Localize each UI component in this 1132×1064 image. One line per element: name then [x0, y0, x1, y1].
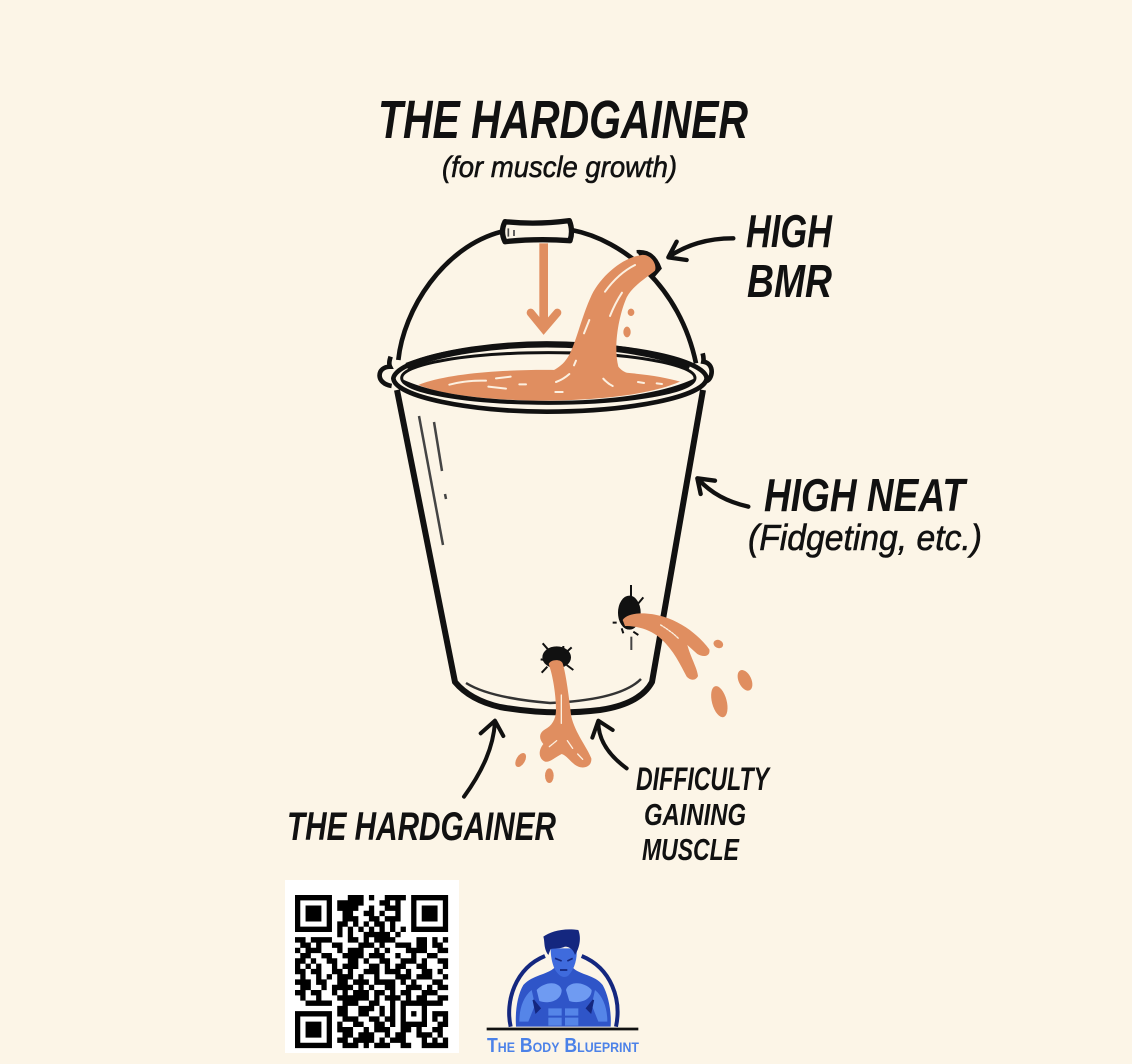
- bucket inner base line: [466, 679, 641, 703]
- logo face shadow: [555, 958, 573, 970]
- rim front stroke: [403, 381, 694, 403]
- label: difficulty gaining muscle: MUSCLE: [642, 832, 740, 867]
- subtitle: (for muscle growth): [442, 151, 677, 184]
- bucket reflection lines: [419, 416, 446, 545]
- logo base line: [487, 1025, 638, 1033]
- title: THE HARDGAINER: [378, 90, 748, 150]
- label: difficulty gaining muscle: [636, 761, 771, 867]
- logo hair: [543, 929, 580, 955]
- bucket body: [397, 390, 703, 712]
- label: difficulty gaining muscle: DIFFICULTY: [636, 761, 771, 797]
- logo wordmark: The Body Blueprint: [487, 1035, 639, 1057]
- handle grip: [502, 221, 572, 242]
- label: HIGH NEAT: HIGH NEAT: [764, 469, 968, 521]
- handle wire: [398, 230, 696, 363]
- bucket illustration: [380, 221, 755, 783]
- arrow: hardgainer: [464, 721, 503, 797]
- liquid surface: [418, 370, 680, 401]
- pouring stream nozzle: [637, 252, 660, 276]
- QR code: [285, 880, 459, 1053]
- arrow: high BMR: [668, 238, 733, 260]
- logo abs: [548, 1008, 578, 1026]
- label: fidgeting: (Fidgeting, etc.): [748, 517, 982, 558]
- label: the hardgainer: THE HARDGAINER: [287, 805, 556, 849]
- logo: The Body Blueprint: [487, 929, 639, 1057]
- logo chest highlights: [537, 983, 592, 1002]
- logo muscle shadows: [533, 1000, 593, 1012]
- leaks and holes: [513, 585, 755, 783]
- rim inner: [402, 353, 695, 403]
- stream drops: [623, 309, 634, 337]
- arrow: difficulty: [592, 721, 627, 768]
- logo arms highlights: [519, 990, 607, 1022]
- label: difficulty gaining muscle: GAINING: [644, 797, 746, 832]
- rim lugs: [380, 353, 712, 386]
- leak highlights: [549, 625, 678, 759]
- side leak stream: [623, 613, 710, 680]
- top of bucket: handle, rim, liquid: [380, 221, 712, 412]
- orange down arrow: [531, 243, 557, 329]
- logo arcs: [509, 956, 618, 1027]
- rim outer: [393, 344, 707, 412]
- side hole: [613, 585, 643, 635]
- liquid highlights: [449, 265, 662, 392]
- label: HIGH: HIGH: [746, 205, 833, 257]
- pouring stream: [537, 255, 655, 377]
- bottom leak stream and puddle: [540, 660, 591, 768]
- label: BMR: BMR: [747, 255, 832, 307]
- logo torso: [516, 968, 611, 1027]
- bottom hole: [541, 643, 573, 673]
- arrow: high NEAT: [697, 478, 748, 507]
- logo head: [551, 948, 577, 977]
- rim top thick stroke: [407, 344, 690, 366]
- leak drops: [513, 638, 755, 783]
